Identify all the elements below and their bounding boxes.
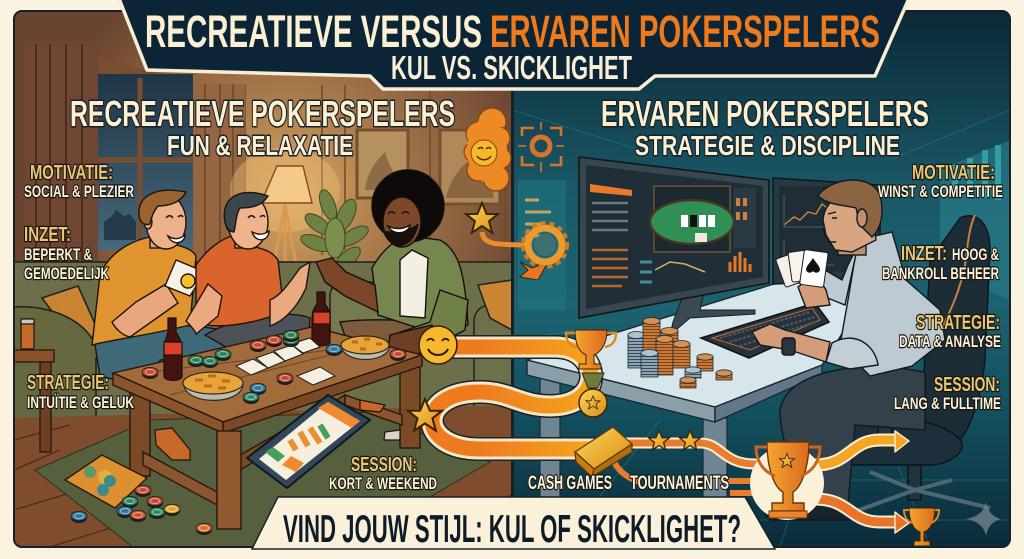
panel: recreational players living room: [10, 11, 520, 547]
wall pictures: [357, 130, 500, 204]
label: right session: [894, 374, 1001, 413]
flow ribbons: game path: [432, 232, 909, 533]
wood floor: [14, 405, 512, 547]
label: left strategy: INTUÏTIE & GELUK: [27, 393, 135, 412]
curtains: [35, 44, 245, 262]
label: left session: KORT & WEEKEND: [329, 474, 437, 493]
coffee table: [113, 327, 422, 529]
player three: [316, 170, 468, 360]
icon: happy brain: [464, 108, 511, 191]
label: right strategy: [899, 312, 1001, 351]
label: right motivation: MOTIVATIE:: [912, 162, 995, 184]
label: left stake: BEPERKT &: [24, 245, 92, 264]
desk legs: [540, 372, 727, 498]
label: left session: [329, 454, 437, 493]
bottom call to action: [252, 497, 775, 551]
chips on table: [142, 330, 406, 404]
table cards: [236, 338, 335, 385]
icon: sparkle: [966, 502, 1001, 536]
left heading: [70, 93, 455, 161]
icon: gold bar: [575, 427, 632, 477]
divider between panels: [511, 88, 514, 547]
icon: medal: [579, 373, 607, 417]
side table with can: [14, 319, 54, 452]
label: left stake: [24, 224, 109, 283]
floor lamp: [230, 148, 340, 262]
subtitle: KUL VS. SKICKLIGHET: [391, 49, 632, 86]
label: left stake: INZET:: [24, 224, 71, 246]
analyst player: [752, 180, 945, 520]
ribbon: gold bar to trophy: [612, 443, 790, 493]
label: right stake: [882, 243, 999, 283]
snack bowls: [183, 336, 390, 400]
icon: ribbon star: [408, 399, 442, 431]
panel: experienced players office: [512, 11, 1010, 547]
label: right stake: INZET:: [901, 243, 947, 265]
icon: target gear: [518, 122, 564, 172]
rug: [35, 412, 490, 547]
left heading: FUN & RELAXATIE: [167, 130, 353, 161]
icon: path stars: [648, 430, 700, 450]
left heading: RECREATIEVE POKERSPELERS: [70, 93, 455, 134]
label: left strategy: [27, 372, 135, 412]
background data walls: [518, 140, 1010, 310]
right heading: [601, 93, 929, 161]
sneakers: [155, 400, 400, 460]
chair: [852, 214, 991, 511]
icon: star: [466, 203, 498, 233]
second monitor with chart: [773, 178, 880, 284]
icon: small trophy: [566, 330, 616, 369]
label: left strategy: STRATEGIE:: [27, 372, 109, 394]
chip bag and spilled chips: [65, 455, 212, 535]
label: left motivation: SOCIAL & PLEZIER: [24, 182, 134, 201]
player two: [186, 192, 310, 355]
label: left session: SESSION:: [351, 454, 417, 476]
keyboard: [701, 303, 829, 358]
chip stacks on desk: [628, 318, 732, 388]
main monitor with poker software: [579, 157, 769, 318]
label: right motivation: [878, 162, 1003, 201]
label: left motivation: MOTIVATIE:: [30, 162, 113, 184]
ribbon: star to gear: [482, 232, 530, 245]
icon: small end trophy: [904, 508, 939, 546]
wall panelling: [245, 85, 505, 260]
soda bottles: [164, 292, 330, 380]
label: tournaments: TOURNAMENTS: [630, 473, 729, 494]
window: [98, 56, 193, 250]
icon: gear medal: [520, 223, 567, 280]
phone with app: [247, 395, 370, 488]
ribbon: trophy down arrow: [815, 499, 909, 533]
monitor stand: [671, 296, 756, 330]
right heading: STRATEGIE & DISCIPLINE: [635, 130, 900, 161]
player one: [92, 190, 226, 388]
ribbon: trophy up arrow: [815, 431, 909, 465]
icon: large trophy badge: [750, 442, 824, 520]
label: left stake: GEMOEDELIJK: [24, 264, 109, 283]
desk: [527, 276, 870, 422]
header banner: [118, 0, 910, 89]
hand of cards: [775, 249, 828, 288]
label: left motivation: [24, 162, 134, 201]
icon: smiley: [419, 326, 457, 364]
title: RECREATIEVE VERSUS: [145, 6, 482, 57]
sofa: [15, 261, 511, 418]
label: right stake: HOOG &: [952, 245, 999, 264]
plant: [300, 189, 369, 262]
label: cash games: CASH GAMES: [528, 473, 612, 494]
